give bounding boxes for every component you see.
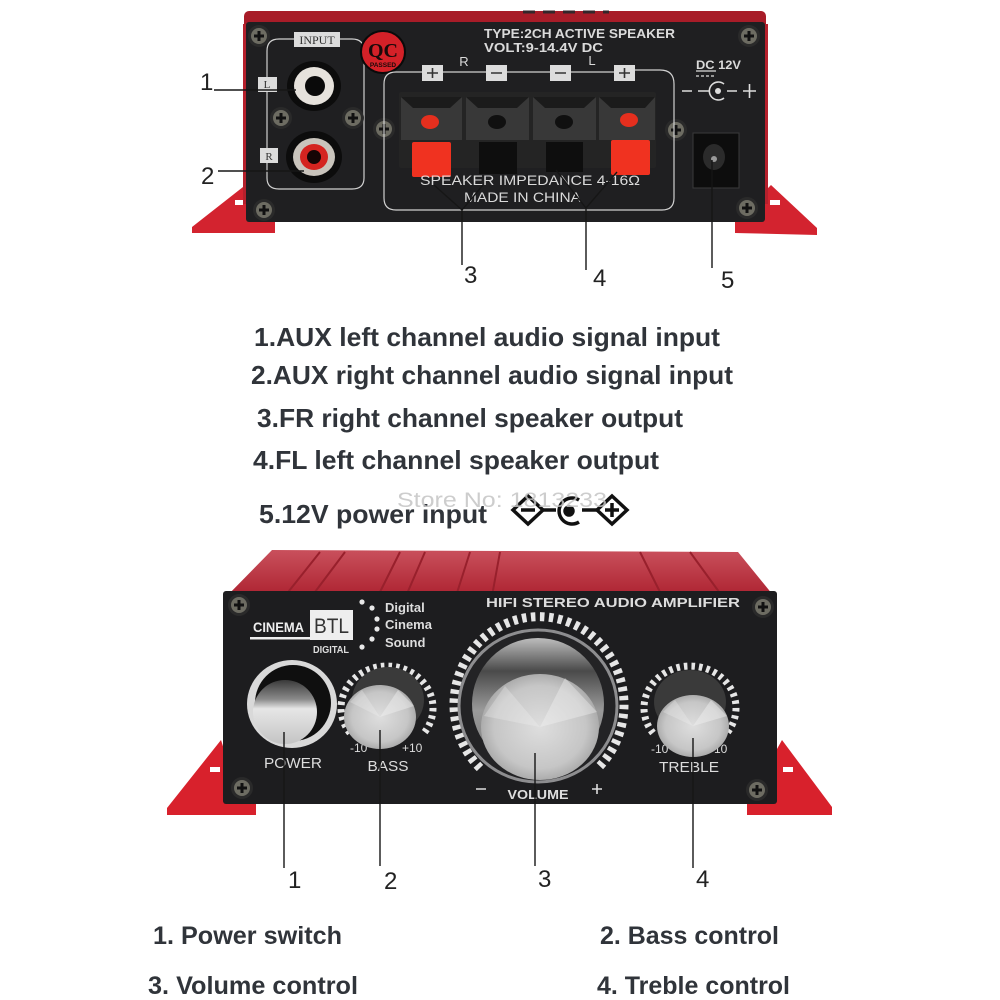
type and voltage text: TYPE:2CH ACTIVE SPEAKER	[484, 26, 676, 41]
QC passed sticker: PASSED	[370, 62, 396, 69]
treble knob: 10	[714, 742, 728, 756]
text block: rear connections	[251, 322, 733, 529]
DC symbol: DC 12V	[696, 58, 741, 72]
speaker terminal outline and polarity labels: L	[588, 53, 596, 68]
speaker terminal block	[399, 92, 656, 177]
input jacks group	[258, 32, 364, 189]
input jacks group: R	[265, 151, 273, 163]
callout numbers rear: 4	[593, 265, 606, 292]
treble knob: -10	[651, 742, 669, 756]
text block: front controls	[148, 922, 790, 1000]
cinema BTL logo: CINEMA	[253, 619, 304, 635]
text block: rear connections: 4.FL left channel speaker output	[253, 445, 659, 475]
text block: front controls: 2. Bass control	[600, 922, 779, 950]
input jacks group: L	[264, 79, 271, 91]
callout numbers rear: 5	[721, 267, 734, 294]
bass knob: -10	[350, 741, 368, 755]
treble knob	[644, 666, 736, 776]
callout numbers front: 3	[538, 866, 551, 893]
QC passed sticker	[361, 31, 405, 73]
text block: front controls: 4. Treble control	[597, 972, 790, 1000]
DC symbol	[682, 58, 756, 100]
treble knob: TREBLE	[659, 759, 719, 776]
callout numbers rear: 3	[464, 262, 477, 289]
text block: rear connections: 5.12V power input	[259, 499, 487, 529]
power switch	[247, 660, 337, 772]
callout numbers rear	[200, 69, 734, 294]
cinema BTL logo: BTL	[314, 615, 349, 638]
watermark: Store No: 1813233	[397, 489, 607, 512]
digital cinema sound label: Digital	[385, 600, 425, 615]
text block: front controls: 3. Volume control	[148, 972, 358, 1000]
icon: DC polarity symbol	[513, 496, 627, 524]
cinema BTL logo: DIGITAL	[313, 645, 349, 656]
callout leaders rear	[214, 90, 712, 270]
callout numbers front: 4	[696, 866, 709, 893]
callout numbers front: 1	[288, 867, 301, 894]
impedance text: SPEAKER IMPEDANCE 4-16Ω	[420, 172, 640, 188]
text block: rear connections: 3.FR right channel speaker output	[257, 403, 683, 433]
callout numbers front	[288, 866, 709, 895]
bass knob	[341, 666, 433, 775]
callout numbers front: 2	[384, 868, 397, 895]
speaker terminal outline and polarity labels: R	[459, 54, 469, 69]
digital cinema sound label: Cinema	[385, 617, 433, 632]
cinema BTL logo	[250, 610, 353, 656]
bass knob: BASS	[368, 758, 408, 775]
power switch: POWER	[264, 755, 322, 772]
text block: rear connections: 2.AUX right channel audio signal input	[251, 360, 733, 390]
text block: front controls: 1. Power switch	[153, 922, 342, 950]
panel: amplifier rear view	[192, 11, 817, 294]
speaker terminal outline and polarity labels	[384, 53, 674, 210]
power socket	[693, 133, 739, 188]
impedance text: MADE IN CHINA	[464, 189, 582, 205]
type and voltage text: VOLT:9-14.4V DC	[484, 40, 604, 55]
corner screws	[228, 594, 774, 801]
digital cinema sound label: Sound	[385, 635, 425, 650]
callout numbers rear: 1	[200, 69, 213, 96]
volume knob: VOLUME	[508, 787, 569, 802]
panel: amplifier front view	[167, 550, 832, 895]
bass knob: +10	[402, 741, 423, 755]
impedance text	[420, 172, 640, 205]
type and voltage text	[484, 26, 676, 55]
model heading: HIFI STEREO AUDIO AMPLIFIER	[486, 595, 741, 610]
text block: rear connections: 1.AUX left channel audio signal input	[254, 322, 720, 352]
digital cinema sound label	[359, 599, 433, 650]
QC passed sticker: QC	[368, 40, 398, 62]
panel screws	[248, 25, 760, 221]
volume knob	[454, 617, 624, 802]
callout numbers rear: 2	[201, 163, 214, 190]
input jacks group: INPUT	[299, 33, 335, 47]
callout leaders front	[284, 730, 693, 868]
